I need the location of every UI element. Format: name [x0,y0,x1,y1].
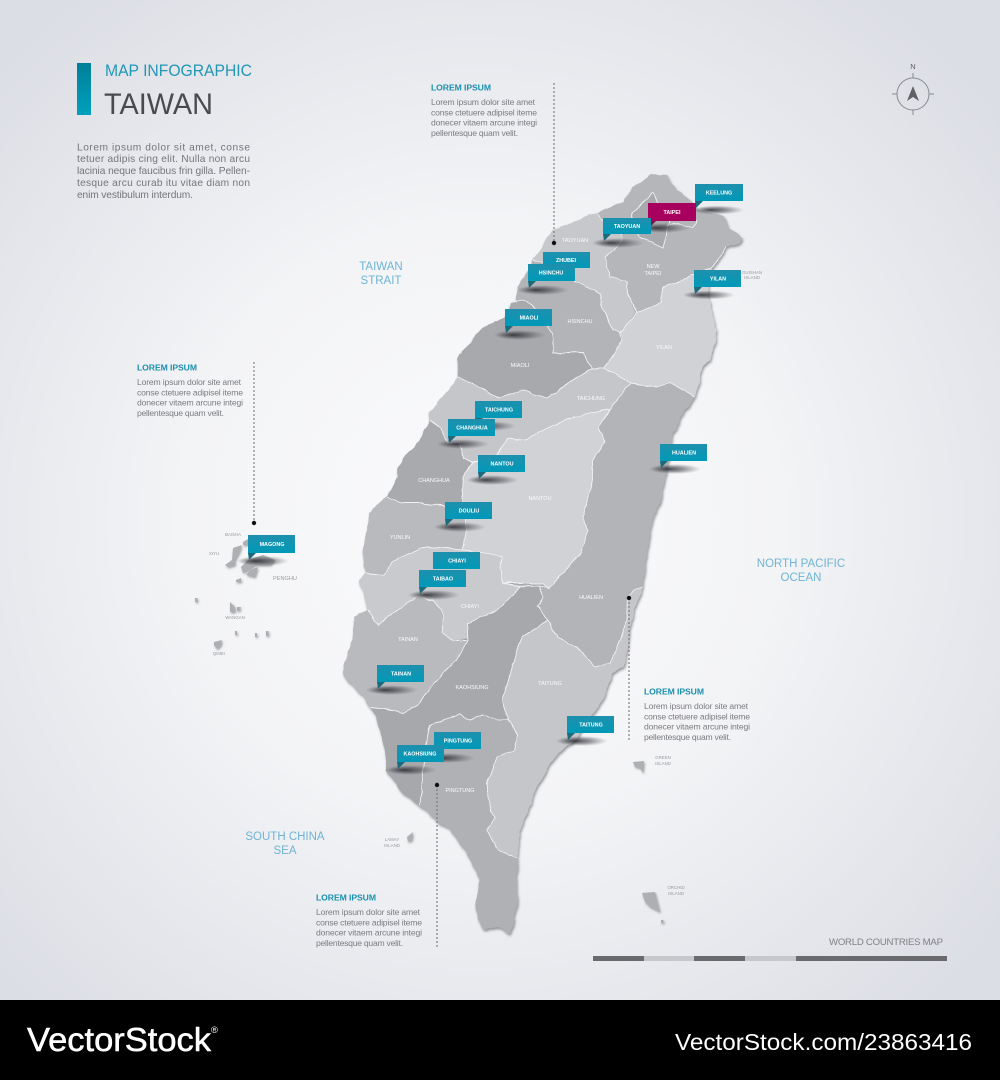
pin: Taibao [408,570,466,600]
callout body: pellentesque quam velit. [316,938,403,948]
island: Magong south [246,567,258,577]
scale bar [593,956,947,961]
callout body: donecer vitaem arcune integi [137,398,243,408]
label: Tainan: TAINAN [398,637,418,643]
region: New Taipei [597,175,743,313]
pin: Chiayi [433,552,480,569]
callout body: pellentesque quam velit. [644,732,731,742]
pin: Hsinchu: HSINCHU [539,270,563,276]
label: New Taipei: NEW [647,264,659,270]
island: Wangan [230,602,235,612]
label: Taitung: TAITUNG [538,681,562,687]
label: Guishan Island: GUISHAN [742,270,762,275]
map source label: WORLD COUNTRIES MAP [829,937,943,948]
island: Baisha [243,539,248,545]
pin: Taichung: TAICHUNG [485,408,513,414]
label: Lamay Island: ISLAND [384,843,400,848]
leader dot [252,521,256,525]
callout body: donecer vitaem arcune integi [644,722,750,732]
region: Hualien [537,383,695,667]
icon: compass: N [910,62,916,71]
label: Yilan: YILAN [656,345,672,351]
pin: Douliu: DOULIU [459,508,479,514]
sea labels [245,261,845,857]
label: Qimei: QIMEI [213,651,225,656]
pin: Zhubei [543,252,590,268]
region: Changhua [387,420,472,510]
callout heading: LOREM IPSUM [316,892,376,902]
pin: Hualien: HUALIEN [672,450,696,456]
label: Wangan: WANGAN [225,615,245,620]
leader dot [627,596,631,600]
island: Green Island [633,761,644,773]
label: Changhua: CHANGHUA [418,478,450,484]
pin: Kaohsiung: KAOHSIUNG [404,752,436,758]
callout heading: LOREM IPSUM [431,82,491,92]
pin: Tainan [366,665,424,695]
label: Nantou: NANTOU [528,496,552,502]
pin: Douliu [434,502,492,532]
pin: Tainan: TAINAN [391,672,411,678]
callout body: pellentesque quam velit. [431,128,518,138]
footer bar [0,1000,1000,1080]
label: North Pacific Ocean: OCEAN [781,572,821,584]
island: Wangan east [237,607,241,611]
pin: Nantou: NANTOU [491,462,514,468]
callout body [431,97,537,138]
footer logo: ® [211,1025,218,1035]
callout body: Lorem ipsum dolor site amet [316,907,421,917]
subtitle: MAP INFOGRAPHIC [105,61,252,80]
island: Orchid Island [642,892,660,912]
pin: Pingtung: PINGTUNG [444,738,472,744]
pin: Taoyuan [592,218,651,248]
intro paragraph: enim vestibulum interdum. [77,190,193,201]
leader line [253,362,255,523]
callout: bottom [316,783,439,948]
label: Orchid Island: ORCHID [667,885,685,890]
region: Taichung [430,368,630,462]
label: Hsinchu: HSINCHU [567,319,593,325]
region: Taipei [632,193,672,248]
region: Hsinchu [517,260,622,368]
leader dot [552,241,556,245]
island: islet west [195,598,198,602]
callout heading: LOREM IPSUM [137,362,197,372]
label: Pingtung: PINGTUNG [445,788,475,794]
pin: Kaohsiung [385,745,444,775]
label: Green Island: ISLAND [655,761,671,766]
leader dot [435,783,439,787]
leader line [553,83,555,243]
region: Taoyuan [533,213,635,333]
title bar accent [77,63,91,115]
label: South China Sea: SOUTH CHINA [245,831,325,843]
callout body: conse ctetuere adipisel iteme [431,108,537,118]
pin: Keelung: KEELUNG [706,190,732,196]
label: Baisha: BAISHA [225,532,241,537]
region: Nantou [462,410,610,588]
internal borders [365,193,727,858]
callout body: donecer vitaem arcune integi [431,118,537,128]
leader line [436,785,438,948]
intro paragraph [77,142,250,201]
callout body: Lorem ipsum dolor site amet [431,97,536,107]
island: small Penghu [236,578,241,582]
intro paragraph: Lorem ipsum dolor sit amet, conse [77,142,250,154]
pin: Nantou [467,455,525,485]
pin: Magong: MAGONG [260,542,284,548]
callout body: conse ctetuere adipisel iteme [316,918,422,928]
icon: compass [892,62,934,115]
pin: Changhua: CHANGHUA [456,426,488,432]
pin: Taichung [464,401,522,431]
label: Hualien: HUALIEN [579,595,603,601]
label: Yunlin: YUNLIN [390,535,410,541]
pin: Taipei: TAIPEI [664,210,681,216]
pin: Taitung [556,716,614,746]
region: Chiayi [360,548,520,640]
footer logo: VectorStock [27,1021,203,1058]
island: islet 2 [255,633,257,637]
region: Miaoli [458,300,592,398]
label: Miaoli: MIAOLI [511,363,530,369]
callout body: Lorem ipsum dolor site amet [644,701,749,711]
region: Pingtung [420,715,518,933]
callout: left [137,362,256,525]
label: Guishan Island: ISLAND [744,275,760,280]
region: Yilan [605,247,727,397]
pin: Pingtung [423,732,481,763]
pin: Keelung [692,184,744,214]
island labels [209,270,762,896]
island: islet 1 [235,631,237,635]
label: Xiyu: XIYU [209,551,219,556]
region: Tainan [342,597,468,713]
label: Orchid Island: ISLAND [668,891,684,896]
label: Taoyuan: TAOYUAN [562,238,588,244]
pin: Miaoli: MIAOLI [520,316,539,322]
label: South China Sea: SEA [273,845,297,857]
pin: Miaoli [494,309,552,340]
callout heading: LOREM IPSUM [644,686,704,696]
label: Kaohsiung: KAOHSIUNG [455,685,489,691]
region: Taitung [487,587,642,858]
label: Taiwan Strait: TAIWAN [359,261,403,273]
callout body: pellentesque quam velit. [137,408,224,418]
intro paragraph: tesque arcu curab itu vitae diam non [77,178,250,189]
label: Taichung: TAICHUNG [577,396,605,402]
label: Lamay Island: LAMAY [385,837,399,842]
label: Green Island: GREEN [655,755,671,760]
leader line [628,598,630,741]
map: Taiwan [342,175,743,933]
callout body: donecer vitaem arcune integi [316,928,422,938]
label: New Taipei: TAIPEI [644,271,662,277]
island: Orchid islet [661,920,664,923]
island: Xiyu [225,545,242,567]
label: Penghu: PENGHU [273,576,297,582]
label: Chiayi: CHIAYI [461,604,479,610]
callout body [316,907,422,948]
city pins [237,184,744,775]
pin: Taitung: TAITUNG [579,722,603,728]
island: islet 3 [266,631,268,636]
pin: Yilan [683,270,741,300]
islands [195,539,664,923]
pin: Changhua [437,419,495,449]
pin: Taibao: TAIBAO [433,576,453,582]
region labels [390,238,672,794]
callout body: Lorem ipsum dolor site amet [137,377,242,387]
pin: Hsinchu [517,264,575,295]
pin: Zhubei: ZHUBEI [556,258,577,264]
intro paragraph: tetuer adipis cing elit. Nulla non arcu [77,154,250,165]
title: TAIWAN [104,88,213,121]
island: Qimei [214,640,222,649]
pin: Magong [237,535,295,566]
pin: Hualien [649,444,707,474]
pin: Chiayi: CHIAYI [448,558,466,564]
island: Magong [241,555,275,573]
label: North Pacific Ocean: NORTH PACIFIC [757,558,845,570]
footer url: VectorStock.com/23863416 [675,1029,972,1055]
region: Yunlin [363,497,467,575]
pin: Taoyuan: TAOYUAN [614,224,640,230]
region: Kaohsiung [372,585,548,805]
callout body: conse ctetuere adipisel iteme [137,388,243,398]
pin: Taipei [638,203,696,233]
intro paragraph: lacinia neque faucibus frin gilla. Pellen- [77,166,250,177]
callout body: conse ctetuere adipisel iteme [644,712,750,722]
label: Taiwan Strait: STRAIT [361,275,401,287]
callout: top [431,82,556,245]
island: Lamay [407,832,413,842]
callout body [644,701,750,742]
pin: Yilan: YILAN [710,276,726,282]
callout: right [627,596,750,742]
callout body [137,377,243,418]
